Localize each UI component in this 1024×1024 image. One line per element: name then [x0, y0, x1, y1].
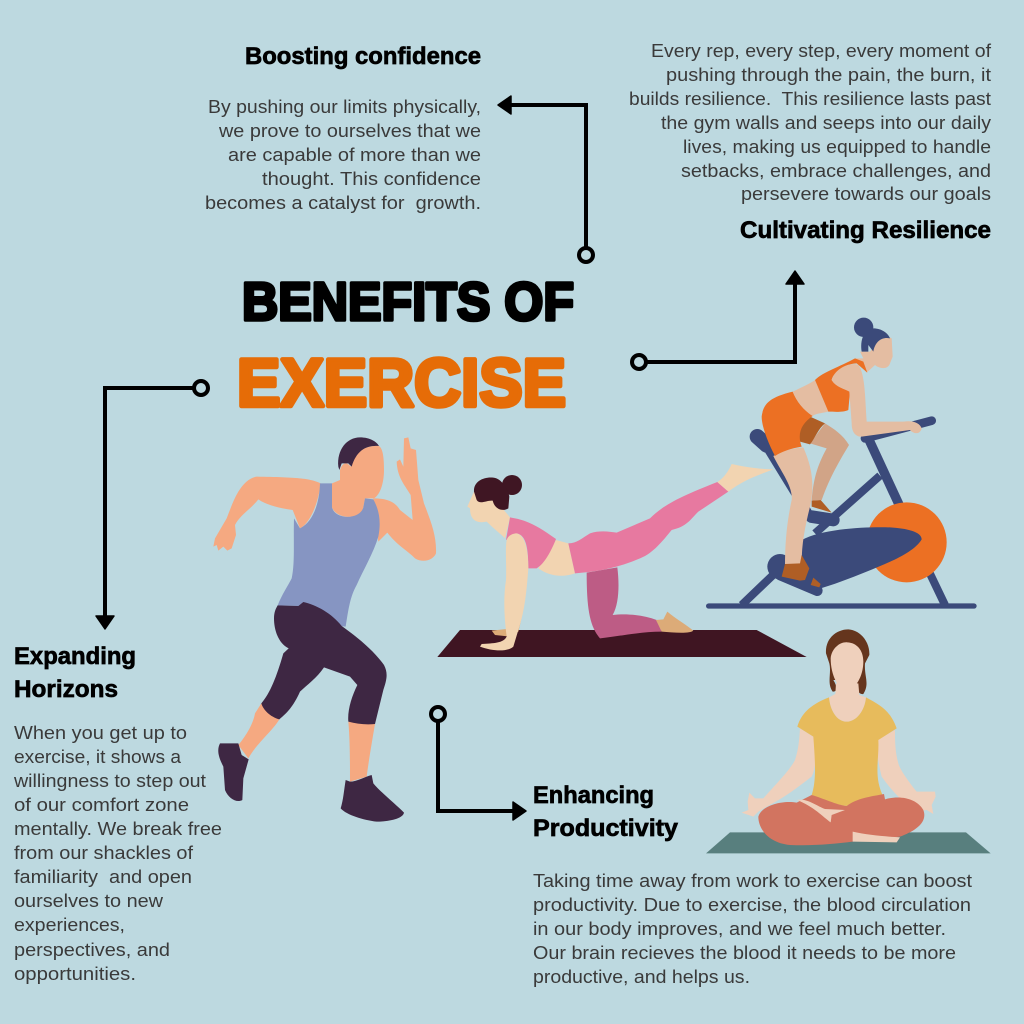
text block: expanding horizons: Horizons [14, 676, 118, 703]
text block: cultivating resilience: pushing through the pain, the burn, it [666, 65, 991, 85]
text block: expanding horizons: willingness to step out [13, 771, 206, 791]
text block: expanding horizons: mentally. We break free [14, 819, 222, 839]
text block: enhancing productivity: in our body improves, and we feel much better. [533, 919, 946, 939]
text block: expanding horizons: from our shackles of [14, 843, 194, 863]
text block: expanding horizons: Expanding [14, 643, 136, 670]
text block: cultivating resilience: lives, making us equipped to handle [683, 137, 991, 157]
text block: cultivating resilience: builds resilience. This resilience lasts past [629, 89, 991, 109]
text block: cultivating resilience: Every rep, every step, every moment of [651, 41, 992, 61]
text block: expanding horizons [13, 643, 222, 984]
illustration: woman meditating [706, 629, 991, 853]
arrow: to cultivating resilience [632, 271, 804, 369]
arrow: to expanding horizons [96, 381, 208, 629]
text block: boosting confidence: By pushing our limits physically, [208, 97, 481, 117]
text block: expanding horizons: experiences, [14, 915, 125, 935]
text block: cultivating resilience: setbacks, embrace challenges, and [681, 161, 991, 181]
text block: boosting confidence: becomes a catalyst for growth. [205, 193, 481, 213]
arrow: to boosting confidence [498, 96, 593, 262]
text block: cultivating resilience [629, 41, 992, 244]
text block: expanding horizons: When you get up to [14, 723, 187, 743]
text block: cultivating resilience: the gym walls and seeps into our daily [661, 113, 991, 133]
illustration: woman on yoga mat, leg raised [437, 464, 807, 657]
title: EXERCISE [237, 345, 566, 421]
text block: boosting confidence [205, 43, 481, 213]
text block: boosting confidence: Boosting confidence [245, 43, 481, 70]
text block: expanding horizons: familiarity and open [14, 867, 192, 887]
text block: enhancing productivity: Our brain recieves the blood it needs to be more [533, 943, 956, 963]
text block: boosting confidence: are capable of more than we [228, 145, 481, 165]
illustration: woman on exercise bike [706, 318, 977, 609]
text block: enhancing productivity: Enhancing [533, 782, 654, 809]
text block: expanding horizons: perspectives, and [14, 940, 170, 960]
title [237, 272, 574, 421]
text block: enhancing productivity: Taking time away from work to exercise can boost [533, 871, 972, 891]
text block: enhancing productivity: productivity. Due to exercise, the blood circulation [533, 895, 971, 915]
text block: enhancing productivity: productive, and helps us. [533, 967, 750, 987]
text block: expanding horizons: opportunities. [14, 964, 136, 984]
arrow: to enhancing productivity [431, 707, 526, 820]
text block: boosting confidence: thought. This confidence [262, 169, 481, 189]
text block: cultivating resilience: Cultivating Resilience [740, 217, 991, 244]
text block: boosting confidence: we prove to ourselves that we [218, 121, 481, 141]
text block: expanding horizons: ourselves to new [14, 891, 164, 911]
text block: cultivating resilience: persevere towards our goals [741, 184, 991, 204]
illustration: runner [213, 437, 436, 822]
text block: expanding horizons: exercise, it shows a [14, 747, 182, 767]
text block: enhancing productivity [533, 782, 972, 987]
text block: enhancing productivity: Productivity [533, 815, 679, 842]
text block: expanding horizons: of our comfort zone [14, 795, 189, 815]
title: BENEFITS OF [242, 272, 574, 332]
